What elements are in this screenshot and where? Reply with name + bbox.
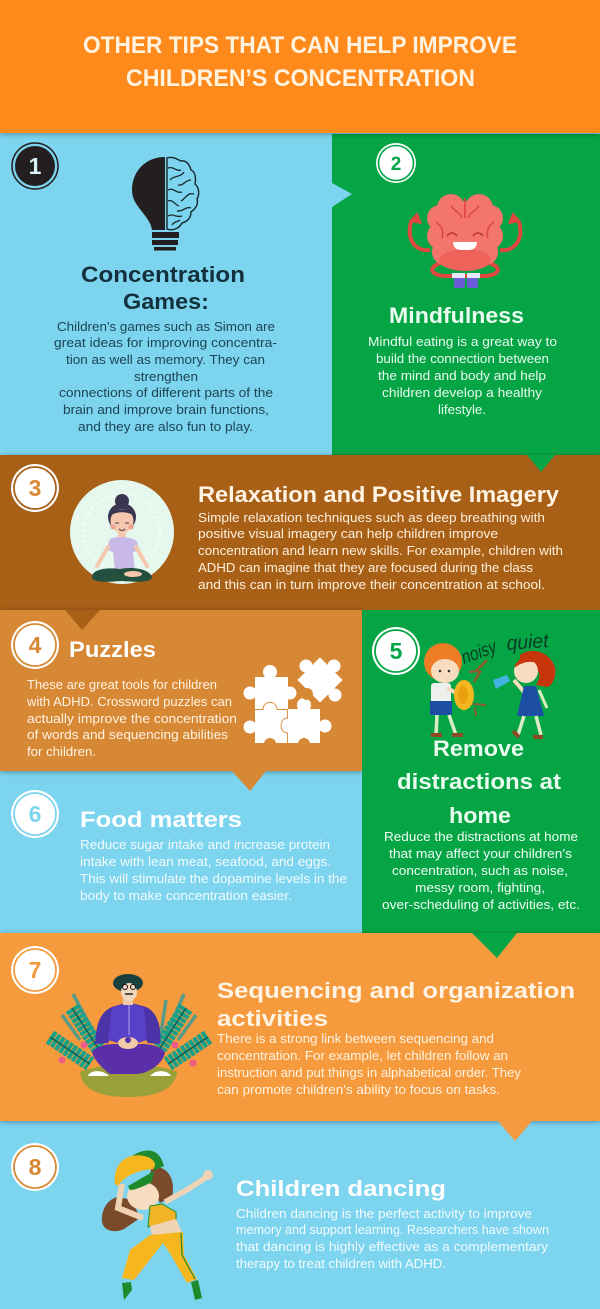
- text: relaxation body: [198, 511, 563, 592]
- text: mindfulness body: build the connection between: [376, 352, 549, 366]
- text: distractions body: that may affect your children's: [389, 847, 572, 861]
- heading: puzzles: Puzzles: [69, 637, 156, 662]
- text: sequencing body: concentration. For example, let children follow an: [217, 1049, 508, 1063]
- text: relaxation body: positive visual imagery can help children improve: [198, 527, 498, 541]
- text: food matters body: This will stimulate the dopamine levels in the: [80, 872, 347, 886]
- text: puzzles body: with ADHD. Crossword puzzles can: [26, 695, 232, 709]
- text: puzzles body: [26, 678, 237, 759]
- heading: relaxation and positive imagery: Relaxation and Positive Imagery: [198, 482, 560, 507]
- text: dancing body: that dancing is highly effective as a complementary: [236, 1240, 549, 1254]
- text: dancing body: memory and support learning. Researchers have shown: [236, 1223, 549, 1237]
- number badge 1: 1: [29, 153, 42, 179]
- text: mindfulness body: Mindful eating is a great way to: [368, 335, 557, 349]
- icon: dancing girl: [102, 1151, 213, 1300]
- number badge 1: [12, 143, 58, 189]
- pointer to panel 8: [498, 1121, 532, 1141]
- icon: half bulb half brain: [132, 157, 199, 250]
- text: distractions body: over-scheduling of activities, etc.: [382, 898, 580, 912]
- panel: relaxation and positive imagery: [0, 455, 600, 610]
- heading: children dancing: Children dancing: [236, 1176, 446, 1201]
- number badge 2: [376, 143, 416, 183]
- text: concentration games body: strengthen: [134, 370, 198, 384]
- text: concentration games body: [54, 320, 277, 434]
- number badge 7: 7: [29, 957, 41, 983]
- text: food matters body: Reduce sugar intake and increase protein: [80, 838, 330, 852]
- text: mindfulness body: lifestyle.: [438, 403, 486, 417]
- number badge 3: [11, 464, 59, 512]
- label: quiet: quiet: [506, 630, 551, 655]
- icon: puzzle pieces: [244, 657, 343, 750]
- text: concentration games body: Children's games such as Simon are: [57, 320, 275, 334]
- heading: concentration games: [81, 262, 245, 314]
- text: sequencing body: can promote children's ability to focus on tasks.: [217, 1083, 500, 1097]
- title: [83, 32, 517, 92]
- pointer from panel 3: [65, 610, 100, 630]
- number badge 4: 4: [29, 632, 42, 658]
- text: distractions body: concentration, such as noise,: [392, 864, 568, 878]
- number badge 6: 6: [29, 801, 41, 827]
- text: food matters body: [80, 838, 347, 903]
- pointer to panel 6: [232, 771, 266, 791]
- number badge 5: [372, 627, 420, 675]
- cymbal: [454, 680, 474, 710]
- heading: remove distractions at home: home: [449, 803, 511, 828]
- title: OTHER TIPS THAT CAN HELP IMPROVE: [83, 32, 517, 59]
- title: CHILDREN’S CONCENTRATION: [126, 65, 475, 92]
- text: mindfulness body: children develop a healthy: [382, 386, 543, 400]
- text: concentration games body: great ideas for improving concentra-: [54, 336, 277, 350]
- heading: concentration games: Concentration: [81, 262, 245, 287]
- boy: [424, 643, 462, 681]
- panel: puzzles: [0, 610, 362, 791]
- heading: remove distractions at home: [397, 736, 562, 828]
- number badge 5: 5: [390, 638, 403, 664]
- panel: mindfulness: [332, 134, 600, 455]
- text: distractions body: [382, 830, 580, 912]
- text: food matters body: intake with lean meat, seafood, and eggs.: [80, 855, 331, 869]
- heading: concentration games: Games:: [123, 289, 209, 314]
- text: relaxation body: ADHD can imagine that they are focused during the class: [198, 561, 533, 575]
- heading: sequencing and organization activities: activities: [217, 1006, 328, 1031]
- text: mindfulness body: [368, 335, 557, 417]
- text: food matters body: body to make concentration easier.: [80, 889, 292, 903]
- text: sequencing body: [217, 1032, 522, 1097]
- panel: remove distractions at home: [362, 610, 600, 933]
- heading: food matters: Food matters: [80, 807, 242, 832]
- heading: remove distractions at home: Remove: [433, 736, 524, 761]
- number badge 8: [11, 1143, 59, 1191]
- heading: sequencing and organization activities: [217, 978, 575, 1031]
- text: puzzles body: These are great tools for children: [27, 678, 217, 692]
- text: distractions body: messy room, fighting,: [415, 881, 545, 895]
- text: distractions body: Reduce the distractions at home: [384, 830, 578, 844]
- panel: children dancing: [0, 1121, 600, 1309]
- heading: sequencing and organization activities: Sequencing and organization: [217, 978, 575, 1003]
- header banner: [0, 0, 600, 133]
- number badge 7: [11, 946, 59, 994]
- text: sequencing body: There is a strong link between sequencing and: [217, 1032, 494, 1046]
- text: concentration games body: connections of different parts of the: [59, 386, 273, 400]
- text: dancing body: [236, 1207, 549, 1271]
- text: concentration games body: and they are also fun to play.: [78, 420, 253, 434]
- panel: food matters: [0, 771, 362, 933]
- text: dancing body: therapy to treat children with ADHD.: [236, 1257, 446, 1271]
- heading: mindfulness: Mindfulness: [389, 303, 524, 328]
- text: concentration games body: tion as well as memory. They can: [66, 353, 265, 367]
- number badge 2: 2: [391, 154, 401, 175]
- panel: concentration games: [0, 134, 332, 455]
- number badge 6: [11, 790, 59, 838]
- number badge 4: [11, 621, 59, 669]
- pointer from panel 5: [472, 933, 517, 958]
- icon: smiling meditating brain: [410, 194, 520, 288]
- heading: remove distractions at home: distractions at: [397, 769, 562, 794]
- text: dancing body: Children dancing is the perfect activity to improve: [236, 1207, 532, 1221]
- panel: sequencing and organization activities: [0, 933, 600, 1141]
- girl: [520, 651, 555, 687]
- text: puzzles body: actually improve the concentration: [27, 712, 237, 726]
- text: puzzles body: of words and sequencing abilities: [27, 728, 228, 742]
- icon: meditating woman: [70, 480, 174, 584]
- number badge 3: 3: [29, 475, 41, 501]
- text: relaxation body: Simple relaxation techniques such as deep breathing with: [198, 511, 545, 525]
- text: relaxation body: and this can in turn improve their concentration at school.: [198, 578, 545, 592]
- text: puzzles body: for children.: [27, 745, 96, 759]
- icon: man meditating in bowl: [50, 974, 208, 1097]
- text: relaxation body: concentration and learn new skills. For example, children with: [198, 544, 563, 558]
- pointer from panel 2: [527, 455, 555, 472]
- text: concentration games body: brain and improve brain functions,: [63, 403, 269, 417]
- label: noisy: noisy: [459, 636, 501, 669]
- text: mindfulness body: the mind and body and help: [378, 369, 546, 383]
- number badge 8: 8: [29, 1154, 42, 1180]
- shh lines: [493, 675, 510, 689]
- icon: noisy boy and quiet girl: [424, 630, 555, 737]
- pointer from panel 1: [332, 183, 352, 207]
- text: sequencing body: instruction and put things in alphabetical order. They: [217, 1066, 522, 1080]
